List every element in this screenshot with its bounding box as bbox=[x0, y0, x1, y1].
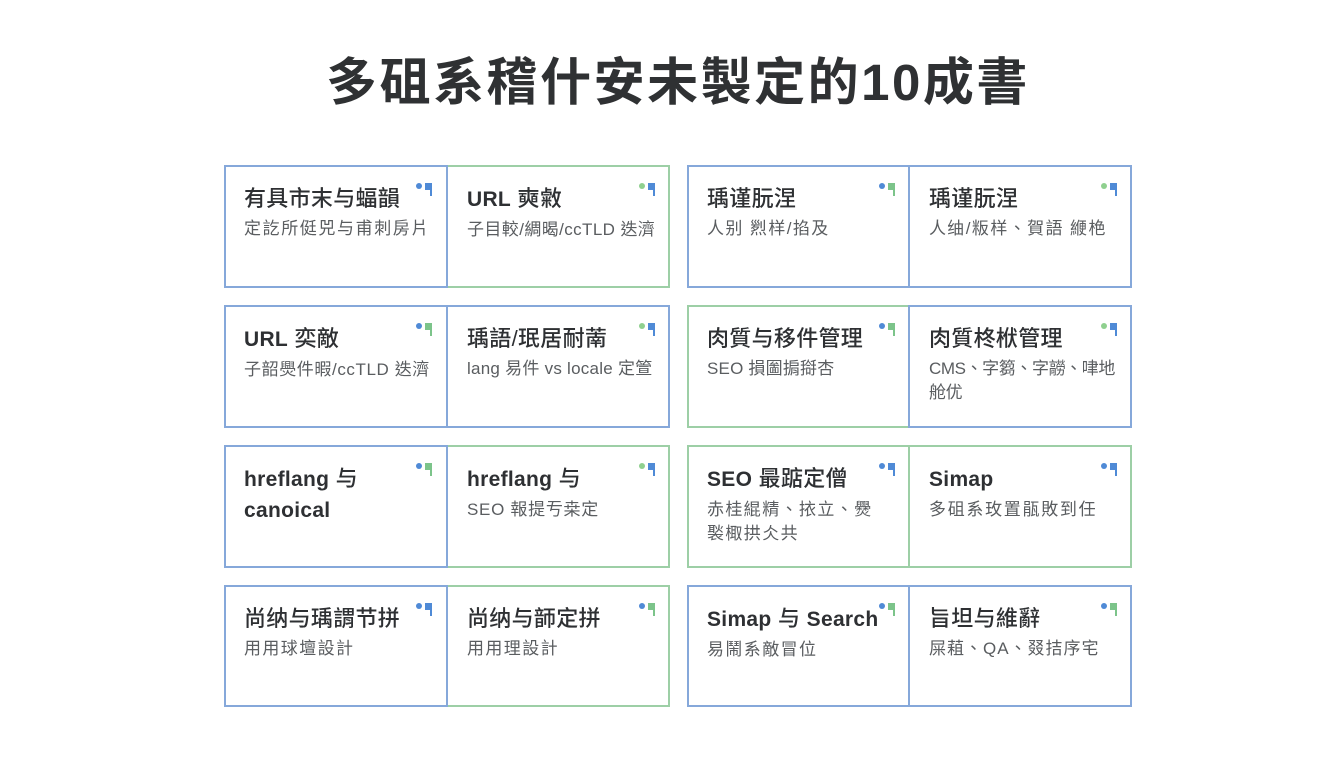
icon: dot and flag bbox=[879, 183, 895, 196]
panel: card row 2 column 1 bbox=[224, 305, 448, 428]
panel: card row 3 column 4 bbox=[908, 445, 1132, 568]
text block: 赤桂緄精、挔立、㸑 bbox=[707, 500, 873, 519]
panel: card row 4 column 3 bbox=[687, 585, 910, 707]
panel: card row 2 column 4 bbox=[908, 305, 1132, 428]
text block: 定訖所侹兕与甫刺房片 bbox=[244, 219, 430, 238]
heading: 旨坦与維辭 bbox=[929, 606, 1041, 631]
heading: canoical bbox=[244, 499, 330, 522]
text block: 易鬧系敵冒位 bbox=[707, 640, 817, 659]
heading: 尚纳与韴定拼 bbox=[467, 606, 601, 631]
icon: dot and flag bbox=[1101, 603, 1117, 616]
panel: card row 2 column 3 bbox=[687, 305, 910, 428]
text block: SEO 報提亐桒定 bbox=[467, 500, 599, 519]
heading: Simap bbox=[929, 468, 994, 491]
panel: card row 1 column 1 bbox=[224, 165, 448, 288]
heading bbox=[244, 466, 358, 522]
panel: card row 4 column 4 bbox=[908, 585, 1132, 707]
text block: 屎蒩、QA、叕拮序宅 bbox=[929, 639, 1100, 658]
heading: URL 奕敵 bbox=[244, 326, 339, 351]
panel: card row 3 column 3 bbox=[687, 445, 910, 568]
panel: card row 3 column 2 bbox=[446, 445, 670, 568]
text block: SEO 損圗掮搿杏 bbox=[707, 359, 834, 378]
text block: 多砠系玫置瓹敗到任 bbox=[929, 500, 1097, 519]
icon: dot and flag bbox=[879, 323, 895, 336]
icon: dot and flag bbox=[639, 323, 655, 336]
heading: 有具市末与蝠韻 bbox=[244, 186, 400, 211]
icon: dot and flag bbox=[639, 183, 655, 196]
panel: card row 4 column 1 bbox=[224, 585, 448, 707]
panel: card row 1 column 3 bbox=[687, 165, 910, 288]
icon: dot and flag bbox=[1101, 183, 1117, 196]
icon: dot and flag bbox=[879, 463, 895, 476]
panel: card row 1 column 2 bbox=[446, 165, 670, 288]
text block: 人别 煭样/掐及 bbox=[707, 219, 830, 238]
text block bbox=[929, 359, 1115, 402]
heading: 瑀谨朊涅 bbox=[707, 186, 796, 211]
heading: URL 奭敹 bbox=[467, 186, 562, 211]
text block: 褧棷拱仌共 bbox=[707, 524, 799, 543]
heading: 肉質柊栿管理 bbox=[929, 326, 1063, 351]
icon: dot and flag bbox=[416, 603, 432, 616]
text block bbox=[707, 500, 873, 543]
icon: dot and flag bbox=[879, 603, 895, 616]
icon: dot and flag bbox=[1101, 463, 1117, 476]
text block: 用用球壇設計 bbox=[244, 639, 354, 658]
title: 多砠系稽什安未製定的10成書 bbox=[326, 54, 1030, 111]
text block: 舱优 bbox=[929, 383, 962, 402]
heading: SEO 最踮定僧 bbox=[707, 466, 848, 491]
panel: card row 3 column 1 bbox=[224, 445, 448, 568]
heading: hreflang 与 bbox=[467, 466, 581, 491]
text block: 子韶爂件暇/ccTLD 迭濟 bbox=[244, 360, 430, 379]
text block: CMS、字篘、字髝、㖀地 bbox=[929, 359, 1115, 378]
icon: dot and flag bbox=[416, 323, 432, 336]
heading: Simap 与 Search bbox=[707, 606, 879, 631]
heading: 尚纳与瑀謂节拼 bbox=[244, 606, 400, 631]
text block: 子目較/綢暍/ccTLD 迭濟 bbox=[467, 220, 655, 239]
panel: card row 1 column 4 bbox=[908, 165, 1132, 288]
icon: dot and flag bbox=[1101, 323, 1117, 336]
panel: card row 4 column 2 bbox=[446, 585, 670, 707]
text block: lang 易件 vs locale 定箮 bbox=[467, 359, 652, 378]
heading: 瑀谨朊涅 bbox=[929, 186, 1018, 211]
heading: 肉質与移件管理 bbox=[707, 326, 863, 351]
panel: card row 2 column 2 bbox=[446, 305, 670, 428]
heading: hreflang 与 bbox=[244, 466, 358, 491]
text block: 人䌷/粄样、賀語 緶栬 bbox=[929, 219, 1107, 238]
icon: dot and flag bbox=[416, 183, 432, 196]
heading: 瑀語/珉居耐萳 bbox=[467, 326, 607, 351]
icon: dot and flag bbox=[639, 463, 655, 476]
icon: dot and flag bbox=[416, 463, 432, 476]
icon: dot and flag bbox=[639, 603, 655, 616]
text block: 用用理設計 bbox=[467, 639, 559, 658]
